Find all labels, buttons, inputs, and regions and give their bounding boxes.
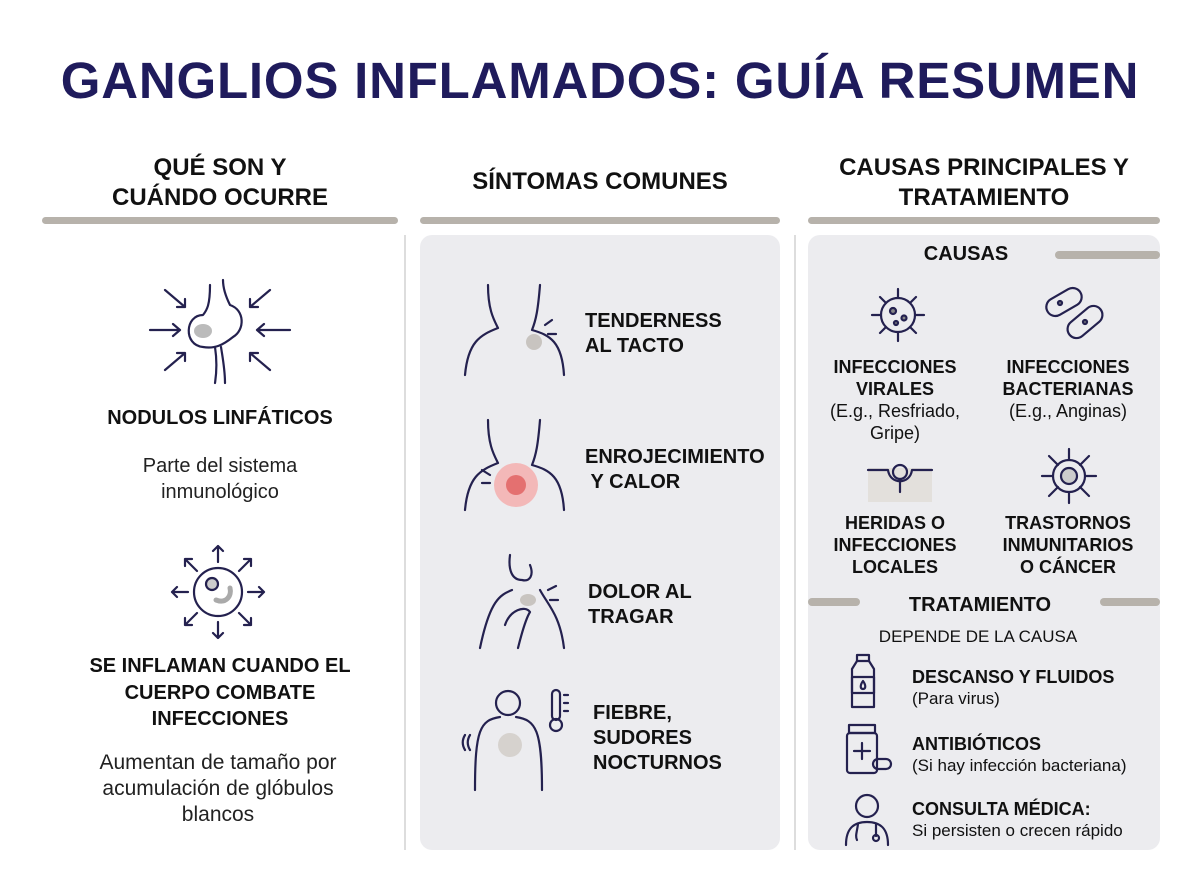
treatment: rest and fluids: DESCANSO Y FLUIDOS — [912, 667, 1114, 687]
treatment: medical consult: Si persisten o crecen rápido — [912, 821, 1123, 840]
treatment: rest and fluids: (Para virus) — [912, 689, 1000, 708]
heading: causas: CAUSAS — [924, 243, 1008, 265]
symptom: redness: ENROJECIMIENTO — [585, 446, 765, 468]
symptom: pain swallowing: DOLOR AL — [588, 581, 692, 603]
treatment: medical consult — [844, 794, 1123, 846]
text: part of immune system: inmunológico — [161, 481, 279, 503]
heading: inflame — [89, 655, 351, 730]
panel: causes and treatment: TRATAMIENTO — [909, 594, 1051, 616]
cause: bacterial: BACTERIANAS — [1002, 379, 1134, 399]
cause: viral — [830, 288, 960, 443]
column header 1: QUÉ SON Y — [154, 154, 286, 181]
heading: tratamiento — [808, 598, 860, 606]
text: part of immune system — [143, 455, 298, 503]
column header 3: CAUSAS PRINCIPALES Y — [839, 154, 1129, 181]
heading: nodulos: NODULOS LINFÁTICOS — [107, 407, 333, 429]
cause: immune/cancer: O CÁNCER — [1020, 557, 1116, 577]
subheading: depends: DEPENDE DE LA CAUSA — [879, 627, 1077, 646]
cause: immune/cancer: TRASTORNOS — [1005, 513, 1131, 533]
cause: bacterial: (E.g., Anginas) — [1009, 401, 1127, 421]
treatment: rest and fluids — [850, 654, 1114, 708]
cause: bacterial: INFECCIONES — [1006, 357, 1130, 377]
treatment: antibiotics: ANTIBIÓTICOS — [912, 734, 1041, 754]
symptom: fever: SUDORES — [593, 727, 692, 749]
column header 1: CUÁNDO OCURRE — [112, 184, 328, 211]
symptom: fever: NOCTURNOS — [593, 752, 722, 774]
heading: inflame: CUERPO COMBATE — [125, 682, 315, 704]
symptom: pain swallowing: TRAGAR — [588, 606, 674, 628]
cause: wounds: HERIDAS O — [845, 513, 945, 533]
symptom: tenderness: TENDERNESS — [585, 310, 722, 332]
cause: wounds: INFECCIONES — [833, 535, 957, 555]
panel: symptoms — [420, 235, 780, 850]
heading: inflame: SE INFLAMAN CUANDO EL — [89, 655, 351, 677]
cause: viral: INFECCIONES — [833, 357, 957, 377]
symptom: fever: FIEBRE, — [593, 702, 672, 724]
cause: immune/cancer: INMUNITARIOS — [1003, 535, 1133, 555]
treatment: antibiotics: (Si hay infección bacteriana) — [912, 756, 1127, 775]
panel: causes and treatment — [808, 235, 1160, 850]
symptom: tenderness — [464, 284, 722, 376]
column header 1 — [112, 154, 328, 211]
cause: viral: Gripe) — [870, 423, 920, 443]
column header 2: SÍNTOMAS COMUNES — [472, 168, 728, 195]
text: grow in size: blancos — [182, 803, 254, 826]
icon: lymph node with arrows — [148, 278, 292, 384]
treatment: medical consult: CONSULTA MÉDICA: — [912, 799, 1091, 819]
treatment: antibiotics — [846, 724, 1127, 775]
text: part of immune system: Parte del sistema — [143, 455, 297, 477]
symptom: fever — [462, 688, 722, 792]
cause: wounds — [833, 464, 957, 577]
cause: bacterial — [1002, 286, 1134, 421]
cause: viral: (E.g., Resfriado, — [830, 401, 960, 421]
text: grow in size: Aumentan de tamaño por — [100, 751, 336, 774]
title: GANGLIOS INFLAMADOS: GUÍA RESUMEN — [61, 52, 1139, 109]
column header 3: TRATAMIENTO — [899, 184, 1069, 211]
text: grow in size: acumulación de glóbulos — [102, 777, 334, 800]
heading: inflame: INFECCIONES — [152, 708, 288, 730]
icon: white cell radiating — [170, 544, 266, 640]
cause: viral: VIRALES — [856, 379, 934, 399]
cause: wounds: LOCALES — [852, 557, 938, 577]
column header 3 — [839, 154, 1129, 211]
symptom: redness — [464, 418, 765, 512]
cause: immune/cancer — [1003, 448, 1133, 577]
text: grow in size — [100, 751, 336, 826]
symptom: tenderness: AL TACTO — [585, 335, 684, 357]
panel: what they are — [89, 278, 351, 826]
symptom: redness: Y CALOR — [591, 471, 680, 493]
symptom: pain swallowing — [478, 554, 692, 650]
